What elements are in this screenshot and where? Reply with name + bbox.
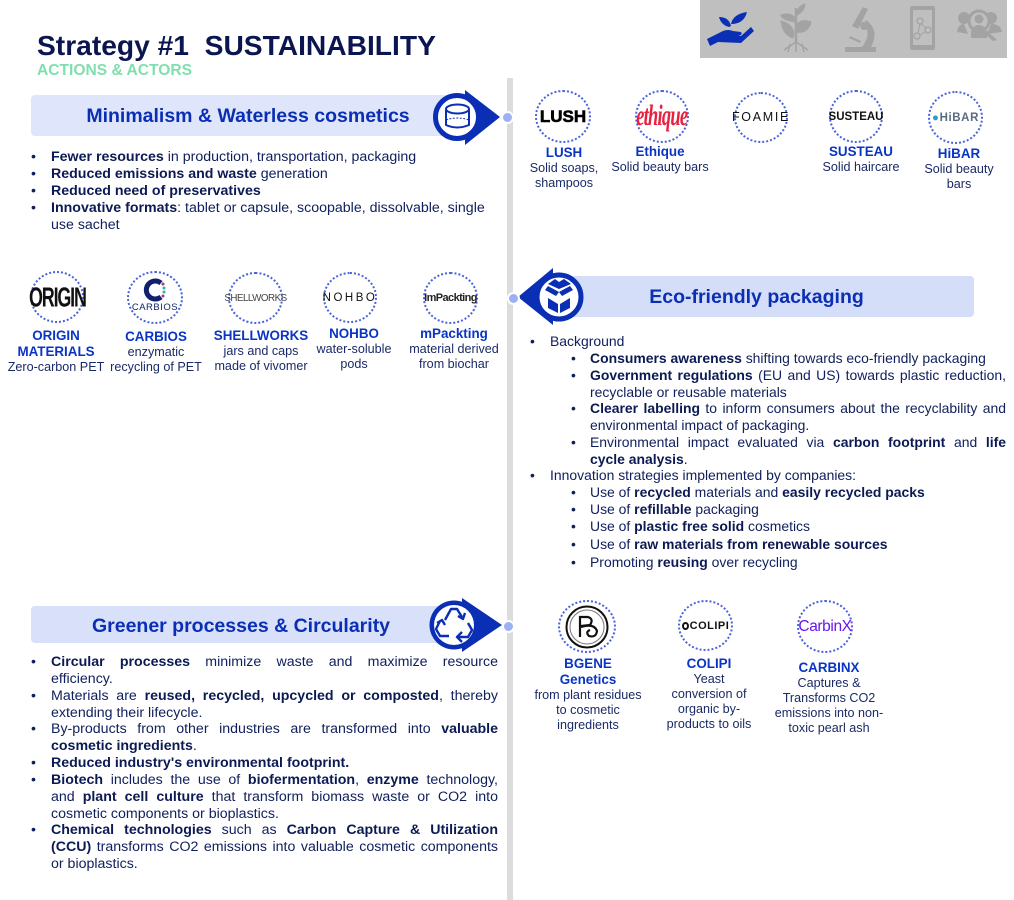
label: Origin: MATERIALS [17,344,95,359]
label: Ethique: Ethique [635,144,685,159]
heading: minimalism [31,95,451,136]
label: Carbios: CARBIOS [125,329,187,344]
label: Shellworks: made of vivomer [214,359,308,373]
icon: arrow badge with box [520,268,584,325]
text block: greener processes: or bioplastics. [51,856,138,872]
label: COLIPI: conversion of [672,687,746,701]
label: Ethique [611,144,709,174]
label: CarbinX: emissions into non- [775,706,883,720]
connector dot [507,292,520,305]
label: HiBAR: bars [947,177,971,191]
label: Origin [8,328,104,374]
label: Origin: Zero-carbon PET [8,360,104,374]
text block: greener processes: Materials are reused, recycled, upcycled or composted, thereby [51,688,498,704]
text block: greener processes: Chemical technologies such as Carbon Capture & Utilization [51,822,498,838]
text block: eco-friendly packaging: Promoting reusing over recycling [590,554,798,570]
label: mPackting: from biochar [419,357,489,371]
text block: eco-friendly packaging: • [571,350,576,366]
logo: Shellworks: SHELLWORKS [224,292,287,304]
text block: eco-friendly packaging: Background [550,333,624,349]
text block: greener processes: extending their lifecycle. [51,705,202,721]
label: Shellworks: jars and caps [224,344,298,358]
logo: HiBAR: ● [932,112,940,124]
heading: eco-friendly [571,276,974,317]
text block: minimalism bullets: • [31,200,36,216]
label: Susteau: SUSTEAU [829,144,893,159]
navigation icon strip [700,0,1007,58]
text block: minimalism bullets: Reduced emissions and waste generation [51,166,328,182]
label: CarbinX: CARBINX [798,660,860,675]
label: Carbios: recycling of PET [110,360,202,374]
text block: greener processes: • [31,822,36,838]
label: CarbinX [775,660,883,735]
text block: minimalism bullets [31,149,485,233]
label: LUSH [530,145,598,190]
text block: eco-friendly packaging: • [571,536,576,552]
logo: Foamie [734,92,788,143]
label: COLIPI: organic by- [678,702,740,716]
logo: Carbios [127,271,183,324]
icon: people with magnifier [957,11,1002,41]
label: COLIPI: Yeast [693,672,725,686]
label: COLIPI: COLIPI [687,656,731,671]
text block: eco-friendly packaging: • [571,400,576,416]
label: mPackting: mPackting [420,326,488,341]
text block: greener processes: cosmetic ingredients. [51,738,197,754]
subtitle: ACTIONS & ACTORS [37,62,192,79]
label: Nohbo: pods [340,357,368,371]
label: Nohbo [316,326,391,371]
text block: eco-friendly packaging: environmental impact of packaging. [590,417,809,433]
text block: eco-friendly packaging: Government regulations (EU and US) towards plastic reduction, [590,367,1006,383]
label: BGENE: ingredients [557,718,619,732]
logo: Shellworks [228,272,283,324]
label: BGENE: to cosmetic [556,703,620,717]
label: mPackting [409,326,499,371]
logo: Foamie: FOAMIE [732,110,790,124]
text block: greener processes: Reduced industry's environmental footprint. [51,755,349,771]
text block: eco-friendly packaging: recyclable or reusable materials [590,384,787,400]
text block: eco-friendly packaging: • [571,554,576,570]
label: Carbios [110,329,202,374]
connector dot [502,620,515,633]
text block: greener processes: • [31,654,36,670]
label: Shellworks [214,328,308,373]
logo: Origin [30,271,84,323]
logo: CarbinX [797,600,853,653]
text block: greener processes: (CCU) transforms CO2 emissions into valuable cosmetic components [51,839,498,855]
text block: eco-friendly packaging [530,333,1006,570]
icon: arrow badge with container [433,90,500,145]
label: BGENE: BGENE [564,656,612,671]
text block: eco-friendly packaging: • [571,367,576,383]
text block: eco-friendly packaging: Innovation strategies implemented by companies: [550,467,856,483]
text block: eco-friendly packaging: Use of plastic free solid cosmetics [590,518,810,534]
text block: eco-friendly packaging: Use of refillable packaging [590,501,759,517]
logo: Nohbo: NOHBO [323,292,377,304]
panel: greener processes header [31,598,513,652]
text block: greener processes: • [31,772,36,788]
heading: eco-friendly: Eco-friendly packaging [649,286,864,308]
vertical divider [507,78,513,900]
text block: eco-friendly packaging: • [530,333,535,349]
text block: minimalism bullets: • [31,183,36,199]
label: LUSH: shampoos [535,176,593,190]
icon: arrow badge with recycling [430,598,502,652]
text block: eco-friendly packaging: • [571,434,576,450]
label: CarbinX: Captures & [798,676,860,690]
logo: mPackting: ImPackting [424,292,477,304]
label: HiBAR: Solid beauty [924,162,994,176]
logo: Nohbo [323,272,377,323]
text block: greener processes: Circular processes minimize waste and maximize resource [51,654,498,670]
connector dot [501,111,514,124]
logo: COLIPI [678,600,733,651]
label: LUSH: LUSH [546,145,582,160]
text block: eco-friendly packaging: Environmental impact evaluated via carbon footprint and life [590,434,1006,450]
text block: eco-friendly packaging: Use of recycled materials and easily recycled packs [590,484,925,500]
label: BGENE: from plant residues [534,688,642,702]
text block: minimalism bullets: Fewer resources in production, transportation, packaging [51,149,416,165]
label: Carbios: enzymatic [128,345,184,359]
label: LUSH: Solid soaps, [530,161,598,175]
logo: Ethique: ethique [636,99,688,132]
icon: plant with roots [781,4,811,52]
label: Origin: ORIGIN [32,328,80,343]
text block: greener processes: By-products from other industries are transformed into valuable [51,721,498,737]
text block: minimalism bullets: use sachet [51,217,120,233]
label: Susteau [822,144,900,174]
text block: greener processes: • [31,755,36,771]
text block: greener processes: Biotech includes the use of biofermentation, enzyme technology, [51,772,498,788]
logo: Carbios: CARBIOS [132,302,178,313]
logo: LUSH [535,90,591,143]
label: Susteau: Solid haircare [822,160,900,174]
title: Strategy #1 SUSTAINABILITY [37,29,436,61]
label: mPackting: material derived [409,342,499,356]
text block: eco-friendly packaging: • [571,484,576,500]
text block: eco-friendly packaging: cycle analysis. [590,451,688,467]
label: Ethique: Solid beauty bars [611,160,709,174]
label: Shellworks: SHELLWORKS [214,328,308,343]
logo: HiBAR: HiBAR [940,112,979,124]
logo: HiBAR [928,91,983,144]
text block: eco-friendly packaging: Clearer labelling to inform consumers about the recyclability and [590,400,1006,416]
label: CarbinX: Transforms CO2 [783,691,875,705]
text block: eco-friendly packaging: Use of raw materials from renewable sources [590,536,887,552]
label: BGENE: Genetics [560,672,616,687]
text block: eco-friendly packaging: Consumers awareness shifting towards eco-friendly packaging [590,350,986,366]
logo: BGENE [558,600,616,653]
label: BGENE [534,656,642,732]
logo: mPackting [423,272,478,324]
icon: smartphone network [910,6,935,50]
logo: Susteau [829,90,883,143]
logo: Ethique [635,90,689,143]
logo: Susteau: SUSTEAU [829,110,883,122]
text block: greener processes [31,654,498,872]
logo: COLIPI: COLIPI [690,620,729,632]
label: COLIPI [667,656,751,731]
heading: minimalism: Minimalism & Waterless cosmetics [86,105,410,127]
logo: LUSH: LUSH [540,106,586,126]
text block: greener processes: cosmetic components or bioplastics. [51,806,279,822]
text block: minimalism bullets: • [31,149,36,165]
text block: minimalism bullets: • [31,166,36,182]
label: Nohbo: NOHBO [329,326,379,341]
label: HiBAR [924,146,994,191]
text block: minimalism bullets: Innovative formats: tablet or capsule, scoopable, dissolvable, single [51,200,485,216]
text block: greener processes: efficiency. [51,671,113,687]
text block: eco-friendly packaging: • [530,467,535,483]
text block: eco-friendly packaging: • [571,501,576,517]
panel: eco-friendly header [507,268,974,325]
text block: eco-friendly packaging: • [571,518,576,534]
text block: greener processes: and plant cell culture that transform biomass waste or CO2 into [51,789,498,805]
text block: greener processes: • [31,688,36,704]
label: COLIPI: products to oils [667,717,751,731]
heading: greener processes: Greener processes & Circularity [92,615,390,637]
panel: minimalism header [31,90,513,145]
text block: minimalism bullets: Reduced need of preservatives [51,183,261,199]
logo: Origin: ORIGIN [29,281,85,312]
label: CarbinX: toxic pearl ash [788,721,870,735]
label: HiBAR: HiBAR [938,146,980,161]
text block: greener processes: • [31,721,36,737]
icon: hand with plant [707,12,754,46]
icon: microscope [845,7,876,52]
heading: greener processes [31,606,451,643]
label: Nohbo: water-soluble [317,342,391,356]
logo: CarbinX: CarbinX [798,618,852,634]
